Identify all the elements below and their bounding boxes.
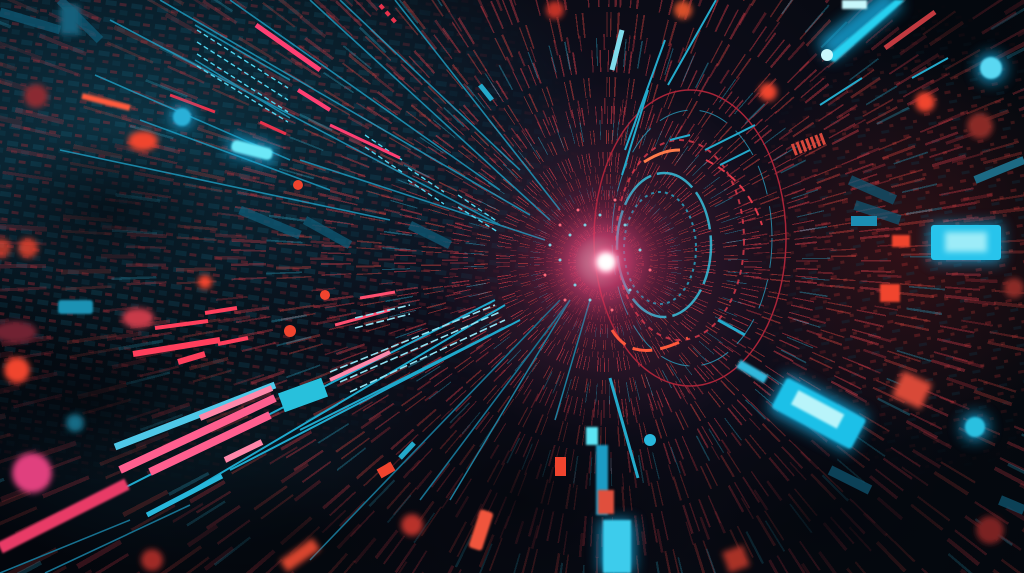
pink light [12,453,52,493]
right-side radial streaks [400,0,1024,510]
upper-left data streaks [0,0,560,245]
lower radial streaks [450,300,590,500]
central light burst [510,172,690,352]
tunnel rings [594,90,786,386]
lower-left data band [0,292,570,573]
